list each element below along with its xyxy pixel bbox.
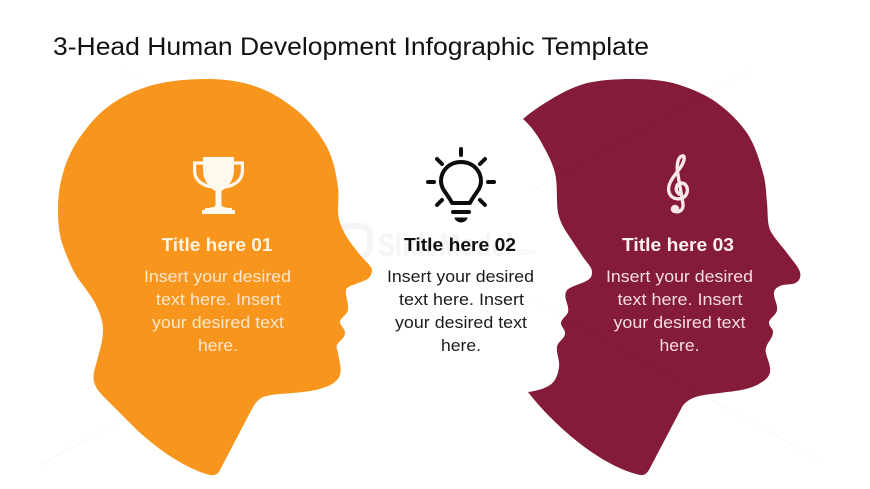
text block: title 01: text here. Insert xyxy=(156,291,281,309)
text block: title 03: here. xyxy=(660,337,700,355)
text block: title 02 xyxy=(387,234,534,355)
text block: title 03 xyxy=(606,234,753,355)
text block: title 01: here. xyxy=(198,337,238,355)
text block: title 03: text here. Insert xyxy=(618,291,743,309)
text block: title 02: your desired text xyxy=(395,314,527,332)
text block: title 02: here. xyxy=(441,337,481,355)
text block: title 03: Title here 03 xyxy=(622,234,734,255)
text block: title 01 xyxy=(144,234,291,355)
text block: title 02: Title here 02 xyxy=(404,234,516,255)
faint background lines xyxy=(40,70,820,465)
icon: trophy xyxy=(195,157,242,214)
text block: title 02: Insert your desired xyxy=(387,268,534,286)
text block: title 01: Insert your desired xyxy=(144,268,291,286)
text block: title 03: your desired text xyxy=(614,314,746,332)
watermark: SlideModel xyxy=(378,227,513,263)
title: 3-Head Human Development Infographic Template xyxy=(53,33,649,61)
icon: light bulb xyxy=(428,149,494,222)
watermark: .com xyxy=(516,247,536,257)
text block: title 01: Title here 01 xyxy=(162,234,272,255)
text block: title 02: text here. Insert xyxy=(399,291,524,309)
icon: treble clef xyxy=(669,156,687,212)
text block: title 01: your desired text xyxy=(152,314,284,332)
head: maroon xyxy=(523,79,800,475)
text block: title 03: Insert your desired xyxy=(606,268,753,286)
head: orange xyxy=(58,79,372,475)
